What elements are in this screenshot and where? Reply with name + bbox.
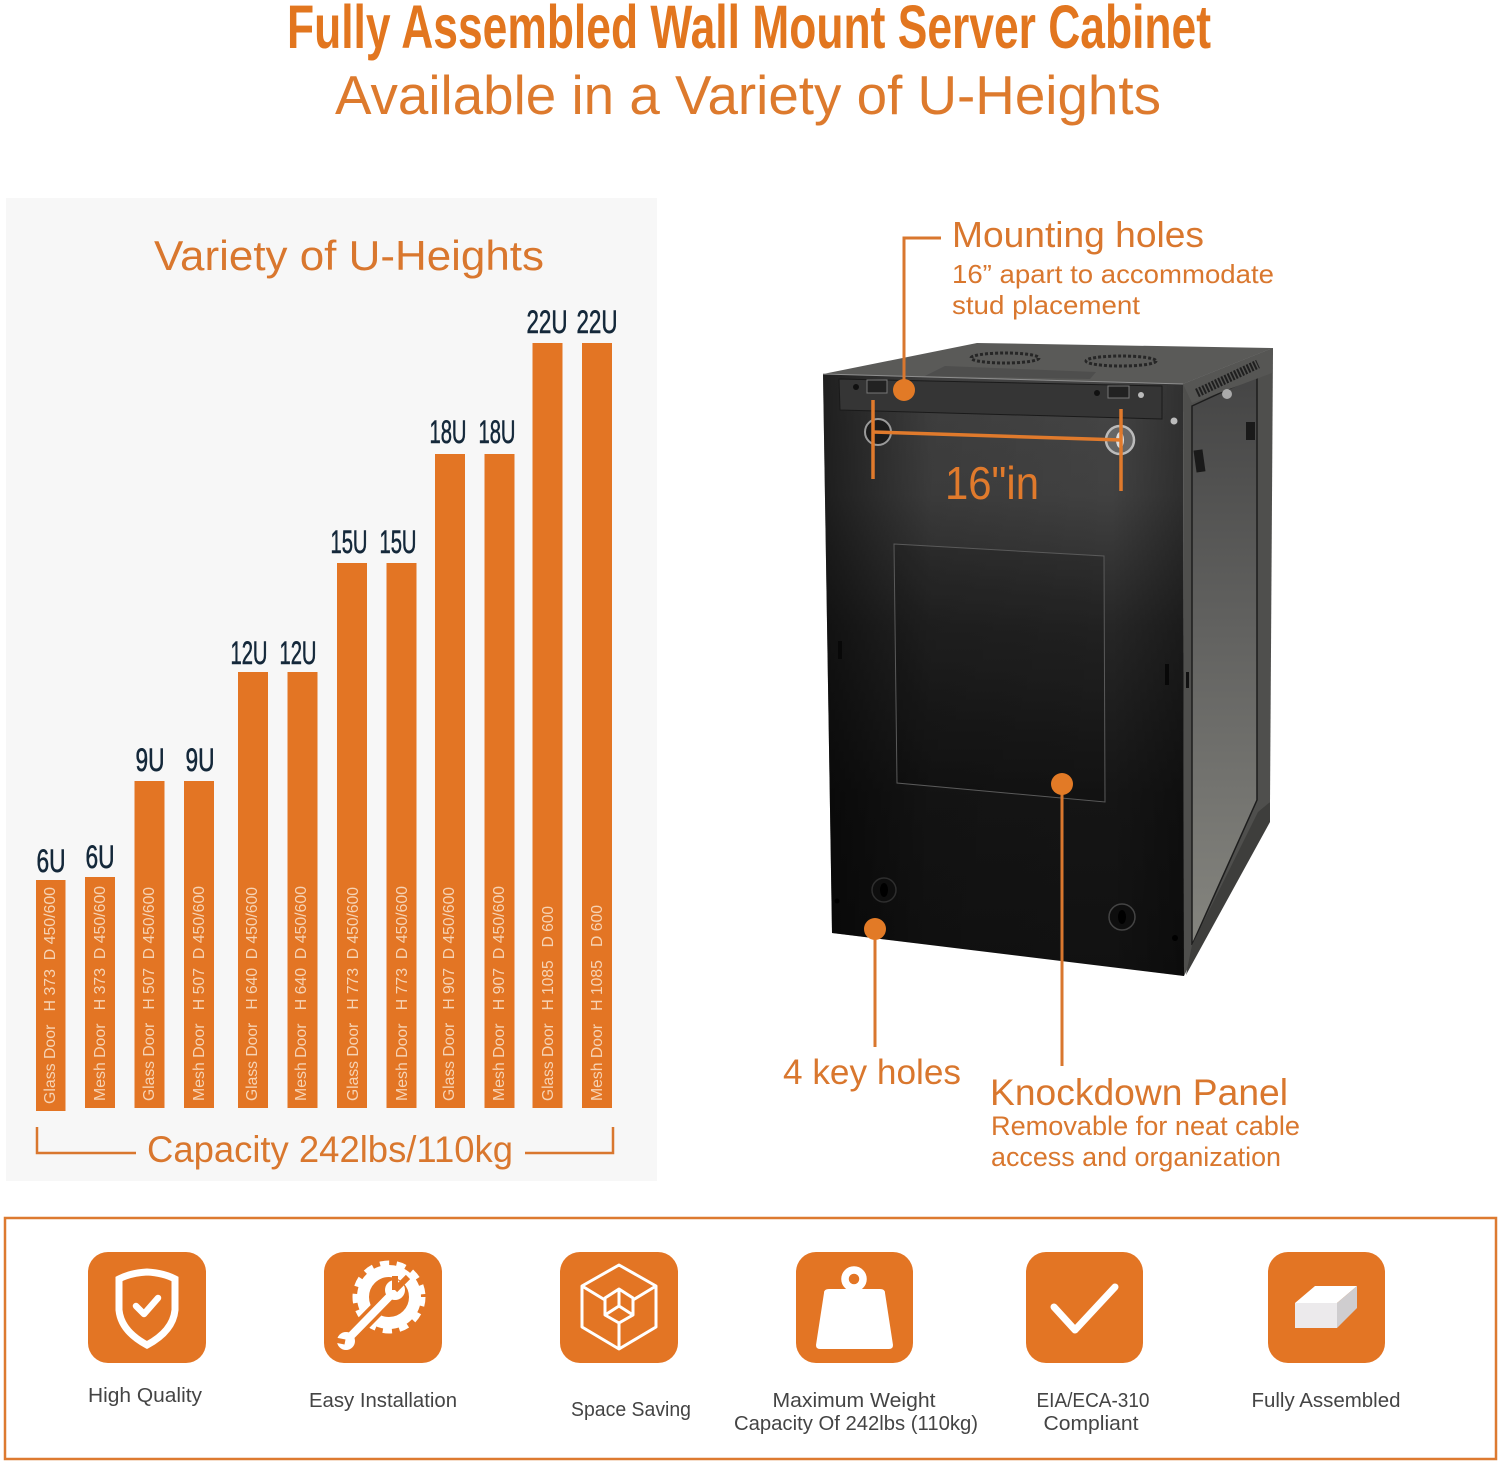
capacity bracket: Capacity 242lbs/110kg [147, 1129, 513, 1170]
cabinet illustration [823, 343, 1273, 976]
callout: mounting holes: Mounting holes [952, 214, 1204, 255]
key holes [865, 419, 1135, 930]
bar chart: Glass Door H 373 D 450/600 [42, 887, 59, 1104]
feature: high quality [88, 1252, 206, 1407]
bar chart: 6U [86, 839, 114, 875]
bar chart [36, 304, 618, 1111]
bar chart: 9U [136, 742, 164, 778]
feature: maximum weight [734, 1252, 978, 1435]
title [287, 0, 1211, 126]
feature: maximum weight: Capacity Of 242lbs (110kg) [734, 1413, 978, 1435]
16 inch dimension marker [873, 400, 1121, 509]
mounting rail [839, 379, 1162, 419]
bar chart: Mesh Door H 507 D 450/600 [191, 886, 208, 1101]
icon: shield [88, 1252, 206, 1363]
knockdown panel [894, 544, 1105, 802]
bar chart: Mesh Door H 773 D 450/600 [394, 886, 411, 1101]
feature: EIA/ECA-310 compliant: Compliant [1044, 1413, 1139, 1435]
cabinet right side [1183, 348, 1273, 976]
bar chart: 18U [430, 414, 466, 450]
bar chart: Mesh Door H 907 D 450/600 [491, 886, 508, 1101]
feature: easy installation: Easy Installation [309, 1390, 457, 1412]
icon: box [1268, 1252, 1385, 1363]
callout: 4 key holes: 4 key holes [783, 1053, 961, 1092]
feature: space saving [560, 1252, 691, 1421]
icon: cube [560, 1252, 678, 1363]
16 inch dimension marker: 16"in [945, 457, 1039, 509]
bar chart: Mesh Door H 373 D 450/600 [92, 886, 109, 1101]
feature: fully assembled [1252, 1252, 1400, 1412]
bar chart: Glass Door H 907 D 450/600 [441, 887, 458, 1101]
bar chart: Glass Door H 640 D 450/600 [244, 887, 261, 1101]
feature: maximum weight: Maximum Weight [772, 1390, 936, 1412]
icon: check mark [1026, 1252, 1143, 1363]
callout: 4 key holes [783, 918, 961, 1092]
feature: space saving: Space Saving [571, 1399, 691, 1421]
callout: knockdown panel: Knockdown Panel [990, 1072, 1288, 1113]
bar chart: 12U [230, 635, 268, 671]
feature: fully assembled: Fully Assembled [1252, 1390, 1400, 1412]
cabinet top [823, 343, 1273, 384]
bar chart: Glass Door H 507 D 450/600 [141, 887, 158, 1101]
cabinet front [823, 374, 1184, 976]
callout: mounting holes: stud placement [952, 290, 1141, 320]
feature: easy installation [309, 1252, 457, 1412]
bar chart: Mesh Door H 1085 D 600 [589, 905, 606, 1101]
icon: gear and wrench [324, 1252, 442, 1363]
feature: EIA/ECA-310 compliant [1026, 1252, 1150, 1435]
callout: knockdown panel: Removable for neat cable [991, 1111, 1300, 1141]
callout: knockdown panel: access and organization [991, 1142, 1281, 1172]
bar chart: 22U [576, 304, 618, 340]
bar chart: Glass Door H 773 D 450/600 [345, 887, 362, 1101]
callout: mounting holes [893, 214, 1274, 401]
bar chart: Mesh Door H 640 D 450/600 [293, 886, 310, 1101]
bar chart: 15U [330, 524, 368, 560]
bar chart: 18U [478, 414, 516, 450]
callout: mounting holes: 16” apart to accommodate [952, 259, 1274, 289]
bar chart: 22U [526, 304, 568, 340]
title: Available in a Variety of U-Heights [335, 64, 1161, 126]
icon: weight [796, 1252, 913, 1363]
panel heading: Variety of U-Heights [154, 232, 544, 279]
features panel [5, 1218, 1496, 1459]
bar chart: Glass Door H 1085 D 600 [540, 906, 557, 1101]
bar chart: 6U [36, 843, 66, 879]
bar chart: 9U [186, 742, 214, 778]
feature: EIA/ECA-310 compliant: EIA/ECA-310 [1036, 1390, 1150, 1412]
callout: knockdown panel [990, 773, 1300, 1172]
bar chart: 15U [380, 524, 416, 560]
bar chart: 12U [280, 635, 316, 671]
capacity bracket [37, 1127, 613, 1170]
panel: variety of U-heights [6, 198, 657, 1181]
feature: high quality: High Quality [88, 1385, 202, 1407]
